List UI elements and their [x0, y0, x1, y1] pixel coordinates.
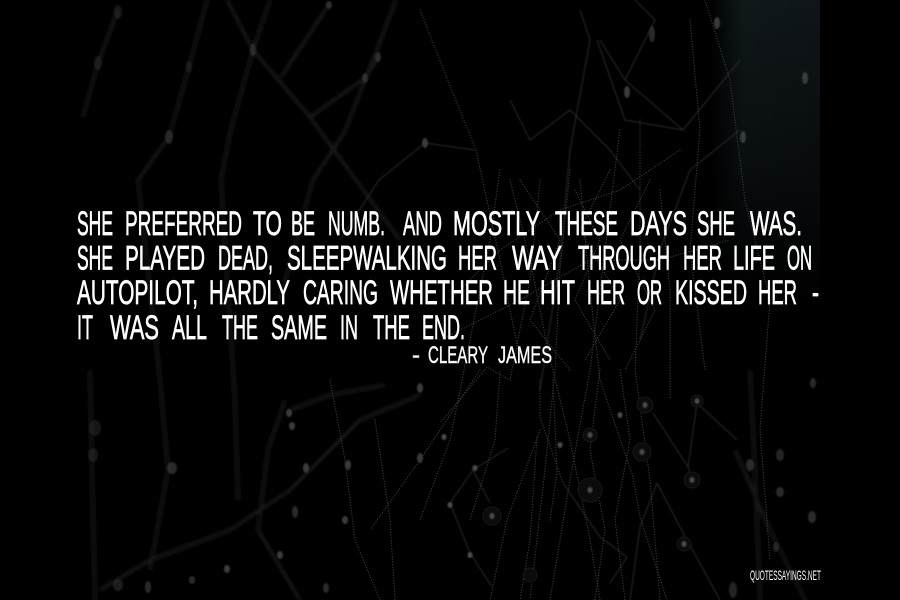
quote line 3: WHETHER: [390, 274, 493, 312]
quote line 3: HARDLY: [209, 274, 290, 312]
quote line 1: [77, 205, 802, 243]
quote line 2: HER: [683, 240, 722, 278]
quote line 4: THE: [373, 309, 410, 347]
author attribution: [412, 342, 552, 369]
quote line 4: IN: [340, 309, 358, 347]
quote line 3: CARING: [303, 274, 378, 312]
quote line 4: ALL: [172, 309, 207, 347]
quote text: ON: [787, 240, 812, 278]
quote line 2: DEAD,: [218, 240, 273, 278]
quote line 4: SAME: [271, 309, 327, 347]
quote line 1: NUMB.: [328, 205, 385, 243]
infographic canvas: QUOTESSAYINGS.NET: [750, 567, 821, 583]
quote line 3: HE: [503, 274, 530, 312]
quote line 3: -: [812, 274, 819, 312]
quote line 4: THE: [222, 309, 258, 347]
quote line 2: HER: [458, 240, 497, 278]
teal haze at the upper right of the photograph: [720, 0, 820, 220]
quote line 4: IT: [77, 309, 93, 347]
quote line 3: OR: [637, 274, 662, 312]
beaded web strands: [330, 0, 770, 600]
dew drops: [442, 398, 700, 558]
quote text: [77, 205, 819, 347]
author attribution: JAMES: [498, 342, 552, 369]
quote line 1: DAYS: [630, 205, 687, 243]
quote line 3: HER: [758, 274, 797, 312]
black margin right of the photograph: [820, 0, 900, 600]
quote line 2: WAY: [512, 240, 562, 278]
author attribution: -: [412, 342, 420, 369]
quote line 4: END.: [422, 309, 465, 347]
quote line 1: SHE: [697, 205, 735, 243]
quote line 2: LIFE: [733, 240, 775, 278]
quote line 1: SHE: [77, 205, 113, 243]
quote line 3: AUTOPILOT,: [77, 274, 198, 312]
quote line 3: [77, 274, 819, 312]
quote line 2: SHE: [77, 240, 113, 278]
quote line 2: PLAYED: [125, 240, 205, 278]
author attribution: CLEARY: [428, 342, 488, 369]
quote line 2: SLEEPWALKING: [287, 240, 447, 278]
quote line 3: HIT: [540, 274, 575, 312]
quote line 1: TO: [253, 205, 282, 243]
quote line 1: WAS.: [750, 205, 802, 243]
quote line 4: WAS: [110, 309, 159, 347]
quote line 4: [77, 309, 465, 347]
quote line 1: PREFERRED: [125, 205, 242, 243]
quote line 1: THESE: [555, 205, 618, 243]
sharp web strands: [340, 0, 740, 600]
quote line 3: HER: [587, 274, 625, 312]
quote line 2: [77, 240, 812, 278]
quote line 2: THROUGH: [578, 240, 670, 278]
quote line 3: KISSED: [675, 274, 747, 312]
dew drops with halos: [483, 395, 703, 582]
quote line 1: AND: [403, 205, 442, 243]
quote line 1: BE: [291, 205, 315, 243]
quote line 1: MOSTLY: [453, 205, 540, 243]
